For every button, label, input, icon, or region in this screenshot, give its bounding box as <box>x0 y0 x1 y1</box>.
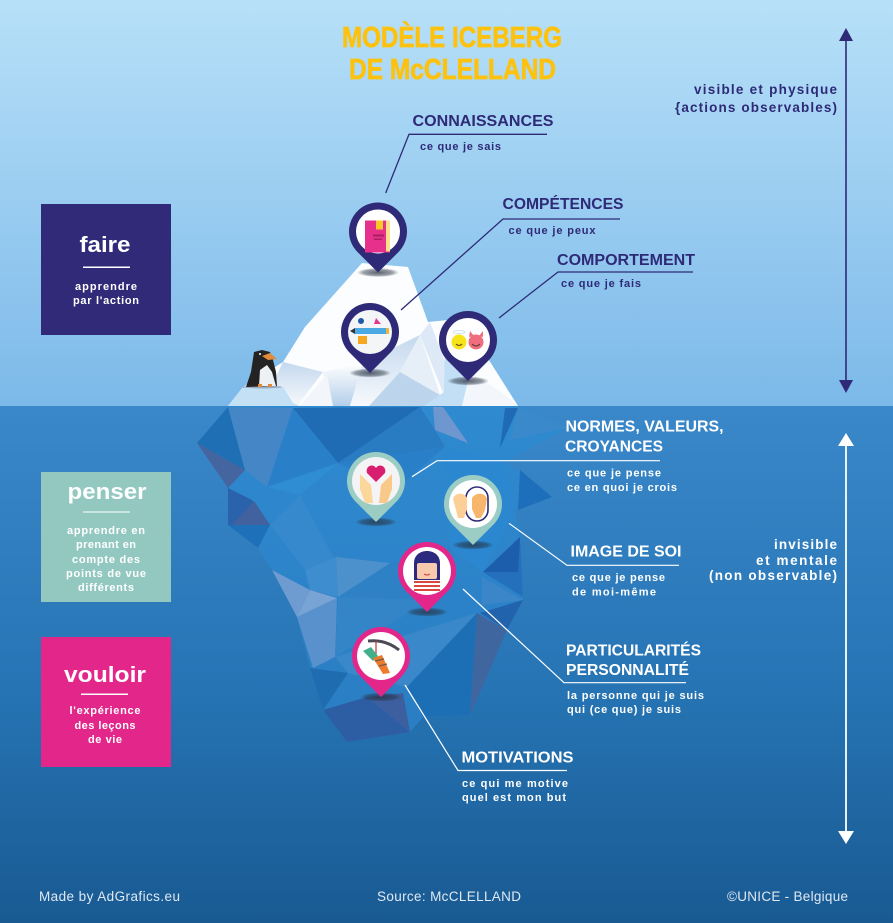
panel: faire: par l'action <box>73 295 139 307</box>
callout: compétences: ce que je peux <box>508 225 596 237</box>
panel: penser <box>41 472 171 602</box>
panel: penser: différents <box>78 582 134 594</box>
pin: particularités (girl portrait) <box>398 542 456 616</box>
pin: connaissances (book) <box>349 202 407 277</box>
callout: compétences: COMPÉTENCES <box>502 196 624 213</box>
panel: penser: compte des <box>72 554 140 566</box>
callout: image de soi <box>509 523 682 599</box>
callout: comportement: ce que je fais <box>561 278 641 290</box>
callout: comportement <box>499 252 696 318</box>
callout: normes, valeurs, croyances: ce en quoi je crois <box>567 482 677 494</box>
callout: compétences <box>401 196 624 310</box>
panel: vouloir: de vie <box>88 734 122 746</box>
panel: vouloir: des leçons <box>74 720 136 732</box>
arrow: visible range <box>839 28 853 393</box>
label: visible et physique: {actions observables) <box>675 100 837 115</box>
label: invisible et mentale: (non observable) <box>709 568 837 583</box>
callout: particularités personnalité: PARTICULARITÉS <box>566 643 701 660</box>
background: sea <box>0 406 893 923</box>
panel: vouloir: l'expérience <box>70 705 140 717</box>
callout: image de soi: IMAGE DE SOI <box>570 544 682 561</box>
label: visible et physique: visible et physique <box>694 82 837 97</box>
panel: faire: faire <box>80 232 130 257</box>
pin: image de soi (fists) <box>444 475 502 550</box>
label: invisible et mentale <box>709 537 837 583</box>
callout: image de soi: ce que je pense <box>572 572 665 584</box>
pin: motivations (carrot) <box>352 627 410 702</box>
callout: particularités personnalité: qui (ce que) je suis <box>567 704 681 716</box>
panel: penser: prenant en <box>76 539 136 551</box>
callout: connaissances: ce que je sais <box>420 141 501 153</box>
background: sky <box>0 0 893 406</box>
panel: faire: apprendre <box>75 281 137 293</box>
callout: connaissances: CONNAISSANCES <box>412 113 554 130</box>
iceberg: submerged part <box>197 406 568 742</box>
panel: penser: penser <box>68 479 147 504</box>
panel: faire <box>41 204 171 335</box>
callout: normes, valeurs, croyances <box>412 419 724 494</box>
callout: image de soi: de moi-même <box>572 587 656 599</box>
footer credit: copyright: ©UNICE - Belgique <box>727 889 848 904</box>
iceberg: visible part above water <box>228 263 518 406</box>
callout: normes, valeurs, croyances: CROYANCES <box>565 439 663 456</box>
title: MODÈLE ICEBERG <box>342 20 562 54</box>
callout: comportement: COMPORTEMENT <box>557 252 696 269</box>
panel: vouloir <box>41 637 171 767</box>
label: invisible et mentale: et mentale <box>756 553 837 568</box>
label: visible et physique <box>675 82 837 115</box>
arrow: invisible range <box>838 433 854 844</box>
callout: motivations <box>405 685 574 804</box>
callout: particularités personnalité: PERSONNALITÉ <box>566 662 689 679</box>
panel: penser: points de vue <box>66 568 146 580</box>
callout: normes, valeurs, croyances: NORMES, VALEURS, <box>566 419 724 436</box>
callout: normes, valeurs, croyances: ce que je pense <box>567 468 661 480</box>
footer credit: made by: Made by AdGrafics.eu <box>39 889 180 904</box>
callout: particularités personnalité <box>463 589 704 716</box>
pin: comportement (angel and devil) <box>439 311 497 386</box>
panel: penser: apprendre en <box>67 525 145 537</box>
callout: particularités personnalité: la personne qui je suis <box>567 690 704 702</box>
pin: normes (heart in hands) <box>347 452 405 526</box>
title <box>342 20 562 86</box>
label: invisible et mentale: invisible <box>774 537 837 552</box>
pin: compétences (pencil) <box>341 303 399 378</box>
callout: connaissances <box>386 113 554 193</box>
title: DE McCLELLAND <box>349 54 556 86</box>
callout: motivations: ce qui me motive <box>462 778 568 790</box>
callout: motivations: quel est mon but <box>462 792 566 804</box>
footer credit: source: Source: McCLELLAND <box>377 889 521 904</box>
icon: penguin <box>242 350 282 388</box>
callout: motivations: MOTIVATIONS <box>462 750 574 767</box>
panel: vouloir: vouloir <box>64 662 146 687</box>
